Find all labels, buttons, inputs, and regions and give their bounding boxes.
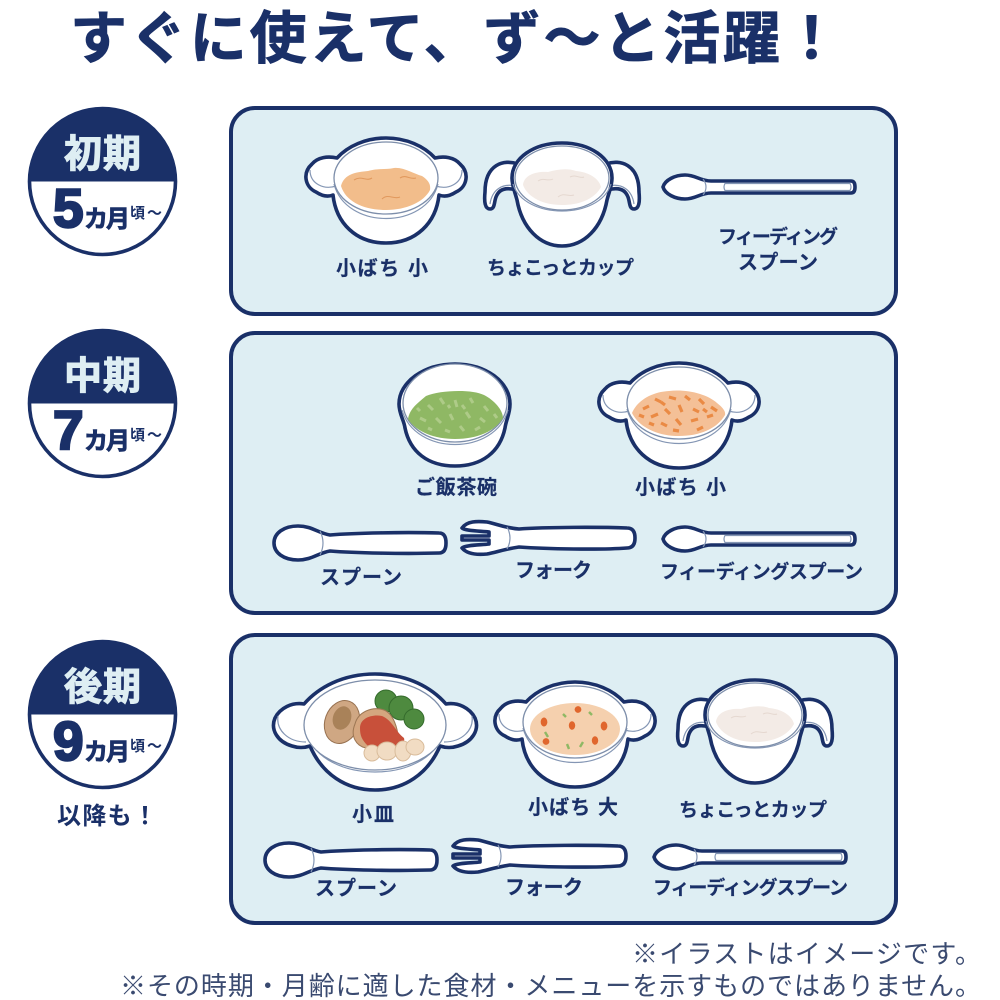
badge: 中期 7カ月頃〜: [30, 330, 176, 476]
icon: small bowl with orange food: [599, 363, 759, 468]
badge: 中期 7カ月頃〜: 頃〜: [130, 427, 162, 444]
badge: 初期 5カ月頃〜: 初期: [64, 134, 141, 176]
panel background: [231, 635, 896, 923]
label: rice bowl: ご飯茶碗: [415, 475, 497, 499]
icon: fork: [462, 522, 635, 554]
badge: 初期 5カ月頃〜: [30, 108, 176, 254]
icon: small bowl with puree: [306, 138, 466, 243]
panel background: [231, 333, 896, 613]
badge: 後期 9カ月頃〜: 頃〜: [130, 738, 162, 755]
label: fork: フォーク: [505, 876, 583, 899]
icon: cup: [485, 143, 639, 246]
panel: 初期: [231, 108, 896, 314]
label: spoon: スプーン: [315, 877, 397, 900]
icon: rice bowl with green food: [399, 364, 510, 466]
label: feeding spoon: フィーディングスプーン: [653, 876, 848, 899]
panel background: [231, 108, 896, 314]
badge: 後期 9カ月頃〜: 9: [53, 710, 84, 772]
badge: 初期 5カ月頃〜: カ月: [84, 206, 130, 233]
badge: 中期 7カ月頃〜: 7: [53, 399, 84, 461]
label: cup: ちょこっとカップ: [487, 257, 634, 279]
label: feeding spoon line two: スプーン: [738, 251, 818, 274]
label: feeding spoon: フィーディングスプーン: [660, 560, 863, 583]
beige pieces: [364, 739, 424, 761]
badge: 後期 9カ月頃〜: 後期: [64, 667, 141, 709]
label: small plate: 小皿: [352, 803, 394, 826]
label: small bowl: 小ばち 小: [336, 257, 428, 280]
badge: 中期 7カ月頃〜: カ月: [84, 428, 130, 455]
footnote: illustration note: ※イラストはイメージです。: [632, 939, 981, 969]
icon: cup: [678, 680, 832, 783]
badge: 後期 9カ月頃〜: カ月: [84, 739, 130, 766]
title: すぐに使えて、ず〜と活躍！: [70, 7, 840, 71]
label: large bowl: 小ばち 大: [528, 796, 618, 819]
icon: feeding spoon: [663, 175, 855, 199]
mushroom: [319, 696, 365, 748]
broccoli: [375, 690, 424, 729]
label: small bowl: 小ばち 小: [635, 476, 726, 499]
icon: fork: [453, 840, 626, 872]
panel: 中期: [231, 333, 896, 613]
icon: feeding spoon: [654, 845, 846, 869]
icon: spoon: [265, 843, 437, 877]
icon: spoon: [274, 526, 446, 560]
panel: 後期: [231, 635, 896, 923]
badge: 後期 9カ月頃〜: [30, 642, 176, 788]
icon: small plate with meal: [274, 674, 476, 790]
label: cup: ちょこっとカップ: [679, 799, 827, 821]
label: spoon: スプーン: [320, 566, 402, 589]
label: feeding spoon: フィーディング: [718, 225, 838, 248]
icon: large bowl with soup: [495, 682, 655, 787]
badge: 初期 5カ月頃〜: 頃〜: [130, 205, 162, 222]
icon: feeding spoon: [663, 527, 855, 551]
badge: 初期 5カ月頃〜: 5: [53, 177, 84, 239]
label: fork: フォーク: [515, 559, 592, 582]
sauce: [360, 716, 404, 748]
badge: 中期 7カ月頃〜: 中期: [64, 356, 141, 398]
text: 以降も！: 以降も！: [57, 803, 157, 830]
